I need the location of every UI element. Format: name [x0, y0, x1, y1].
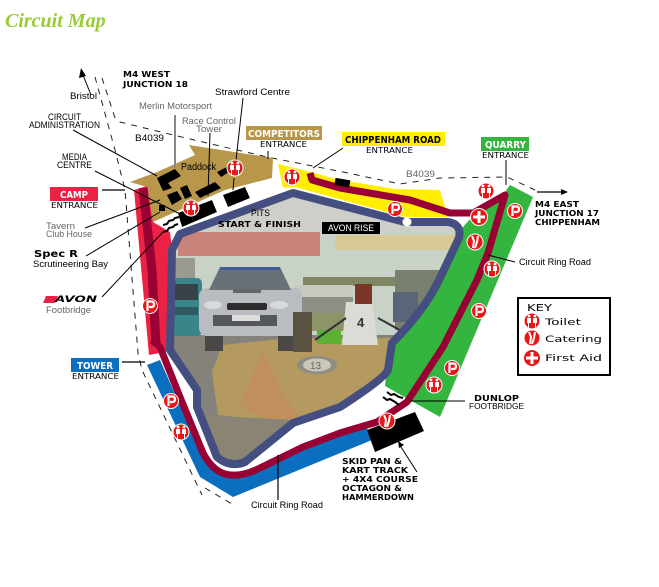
label: tavern club house	[46, 221, 92, 239]
label: tower entrance: TOWER	[77, 361, 113, 372]
pits	[178, 178, 285, 227]
label: media centre: MEDIA	[62, 152, 87, 162]
label: tower entrance: ENTRANCE	[72, 372, 119, 381]
label: B4039 west: B4039	[135, 133, 164, 143]
label: camp entrance	[50, 187, 98, 210]
zone: tower	[147, 360, 372, 497]
label: Race Control Tower: Tower	[196, 124, 222, 134]
label: quarry entrance	[481, 137, 529, 160]
photo montage inside track	[174, 197, 456, 460]
junction white dot	[402, 218, 412, 226]
label: skid pan: SKID PAN &	[342, 457, 402, 466]
label: M4 west: JUNCTION 18	[122, 80, 188, 89]
label: B4039 east: B4039	[406, 169, 435, 179]
label: avon rise: AVON RISE	[328, 223, 374, 233]
avon footbridge patch	[163, 213, 182, 233]
teal car	[172, 278, 202, 336]
panel: key: First Aid	[545, 354, 602, 364]
label: camp entrance: CAMP	[60, 190, 88, 201]
zone: paddock	[130, 145, 273, 222]
label: Spec R	[33, 249, 109, 269]
paddock buildings	[157, 167, 229, 211]
label: circuit administration: CIRCUIT	[48, 112, 81, 122]
label: circuit ring road east: Circuit Ring Road	[519, 257, 591, 267]
lap marker 13	[297, 356, 337, 374]
label: dunlop footbridge: FOOTBRIDGE	[469, 402, 524, 411]
label: chippenham road entrance: CHIPPENHAM ROAD	[345, 135, 441, 146]
label: Bristol: Bristol	[70, 91, 97, 101]
blue car	[393, 292, 418, 322]
silver car	[199, 267, 302, 351]
logo: Avon: AVON	[54, 295, 98, 305]
label: tower entrance	[71, 358, 119, 381]
label: circuit ring road south: Circuit Ring Road	[251, 500, 323, 510]
chippenham marker	[334, 178, 350, 187]
lap marker 13: 13	[310, 361, 322, 372]
icon: first aid	[470, 208, 488, 226]
label: camp entrance: ENTRANCE	[51, 201, 98, 210]
label: Strawford Centre: Strawford Centre	[215, 87, 290, 97]
label: competitors entrance	[246, 126, 322, 149]
tan overlay	[212, 338, 392, 423]
label: quarry entrance: ENTRANCE	[482, 151, 529, 160]
label: footbridge: Footbridge	[46, 305, 91, 315]
logo: Avon	[43, 295, 98, 305]
label: tavern club house: Club House	[46, 229, 92, 239]
label: M4 east: M4 EAST	[535, 200, 580, 209]
single seater	[293, 284, 405, 352]
label: M4 east: CHIPPENHAM	[535, 218, 600, 227]
label: pits start and finish	[218, 208, 301, 229]
label: skid pan: OCTAGON &	[342, 484, 402, 493]
road	[174, 335, 394, 418]
label: skid pan: HAMMERDOWN	[342, 493, 414, 502]
label: Race Control Tower	[182, 116, 236, 134]
circuit ring road	[152, 173, 505, 475]
panel: key: Catering	[545, 335, 602, 345]
footbridge marks	[163, 217, 403, 405]
zone: chippenham road	[278, 164, 448, 217]
label: competitors entrance: ENTRANCE	[260, 140, 307, 149]
zone: quarry	[385, 185, 533, 417]
label: skid pan: + 4X4 COURSE	[342, 475, 418, 484]
label: Merlin Motorsport: Merlin Motorsport	[139, 101, 213, 111]
label: pits start and finish: PITS	[251, 208, 270, 218]
label: M4 east	[534, 200, 600, 227]
label: pits start and finish: START & FINISH	[218, 220, 301, 229]
label: chippenham road entrance	[342, 132, 445, 155]
dashed access roads	[95, 77, 535, 504]
panel: key	[518, 298, 610, 375]
title: Circuit Map	[5, 10, 106, 32]
label: competitors entrance: COMPETITORS	[248, 129, 320, 140]
label: media centre	[57, 152, 92, 170]
label: Race Control Tower: Race Control	[182, 116, 236, 126]
icons: parking	[142, 202, 522, 408]
label: quarry entrance: QUARRY	[485, 140, 527, 151]
single seater: 4	[357, 315, 365, 330]
label: M4 west	[122, 70, 188, 89]
background building	[295, 285, 353, 331]
label: chippenham road entrance: ENTRANCE	[366, 146, 413, 155]
panel: key: KEY	[527, 303, 552, 314]
label: Spec R: Scrutineering Bay	[33, 259, 109, 269]
merlin leader	[174, 115, 176, 168]
label: skid pan	[342, 457, 418, 502]
label: circuit administration: ADMINISTRATION	[29, 120, 100, 130]
panel: key: Toilet	[543, 318, 582, 328]
arrowheads	[79, 68, 568, 448]
label: dunlop footbridge	[469, 394, 524, 411]
label: Paddock: Paddock	[181, 162, 217, 173]
icons: toilets	[173, 160, 500, 440]
label: media centre: CENTRE	[57, 160, 92, 170]
label: circuit administration	[29, 112, 100, 130]
race track outline	[170, 193, 460, 464]
label: Spec R: Spec R	[34, 249, 79, 260]
label: avon rise	[322, 222, 380, 234]
skid pan block	[367, 412, 424, 452]
label: dunlop footbridge: DUNLOP	[474, 394, 519, 403]
label: M4 west: M4 WEST	[123, 70, 171, 79]
zone: camp	[134, 186, 172, 355]
label: M4 east: JUNCTION 17	[534, 209, 599, 218]
leader lines	[73, 70, 562, 500]
label: tavern club house: Tavern	[46, 221, 75, 231]
label: skid pan: KART TRACK	[342, 466, 409, 475]
icons: catering	[379, 234, 483, 429]
